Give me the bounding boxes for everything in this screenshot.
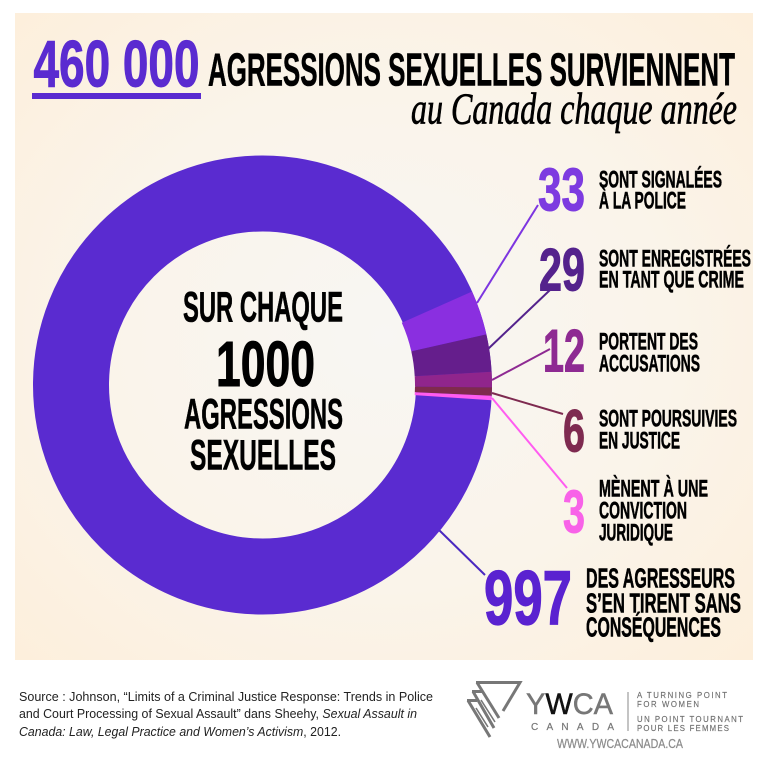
wordmark: YWCA [526,688,613,721]
source text: Source : Johnson, “Limits of a Criminal Justice Response: Trends in Police [19,690,433,704]
tagline [637,691,743,733]
donut chart [71,194,492,576]
stat: 3 [563,474,708,546]
stat: 6: EN JUSTICE [599,428,680,454]
stat: 997 [484,556,741,642]
divider [628,692,629,731]
source text: and Court Processing of Sexual Assault” dans Sheehy, Sexual Assault in [19,707,417,721]
donut centre text: SUR CHAQUE [183,284,343,332]
stat: 33: À LA POLICE [599,186,686,214]
stat: 12: 12 [543,318,585,384]
donut centre text: AGRESSIONS [184,392,343,438]
title [32,26,735,100]
tagline: UN POINT TOURNANT [637,715,743,724]
title number: 460 000: 460 000 [34,26,200,100]
stat: 33 [538,156,722,224]
stat: 33: 33 [538,156,585,224]
stat: 3: 3 [563,478,585,546]
wordmark: Canada: CANADA [531,722,614,733]
source text: Canada: Law, Legal Practice and Women’s Activism, 2012. [19,725,341,739]
segment: 3 [415,392,492,400]
donut centre text: SEXUELLES [190,432,336,480]
source text [19,690,433,739]
segment: 12 [415,372,492,387]
leader lines [439,205,567,575]
segment: 6 [415,387,492,396]
icon: nested triangles [467,682,520,737]
stat: 3: CONVICTION [599,498,687,524]
tagline: POUR LES FEMMES [637,724,729,733]
segment: 997 [71,194,454,576]
website: WWW.YWCACANADA.CA [557,737,684,751]
donut centre text [183,284,343,480]
stat: 29 [539,236,751,304]
segment: 29 [411,334,492,376]
stat: 3: JURIDIQUE [599,520,673,546]
stat: 12 [543,318,700,384]
stat: 6: 6 [563,398,585,464]
YWCA logo [467,682,743,751]
stat: 997: 997 [484,556,572,642]
stat: 6 [563,398,737,464]
tagline: FOR WOMEN [637,700,699,709]
tagline: A TURNING POINT [637,691,727,700]
segment: 33 [402,292,486,351]
title underline [32,93,201,99]
stat: 29: 29 [539,236,585,304]
donut centre text: 1000 [216,328,315,400]
